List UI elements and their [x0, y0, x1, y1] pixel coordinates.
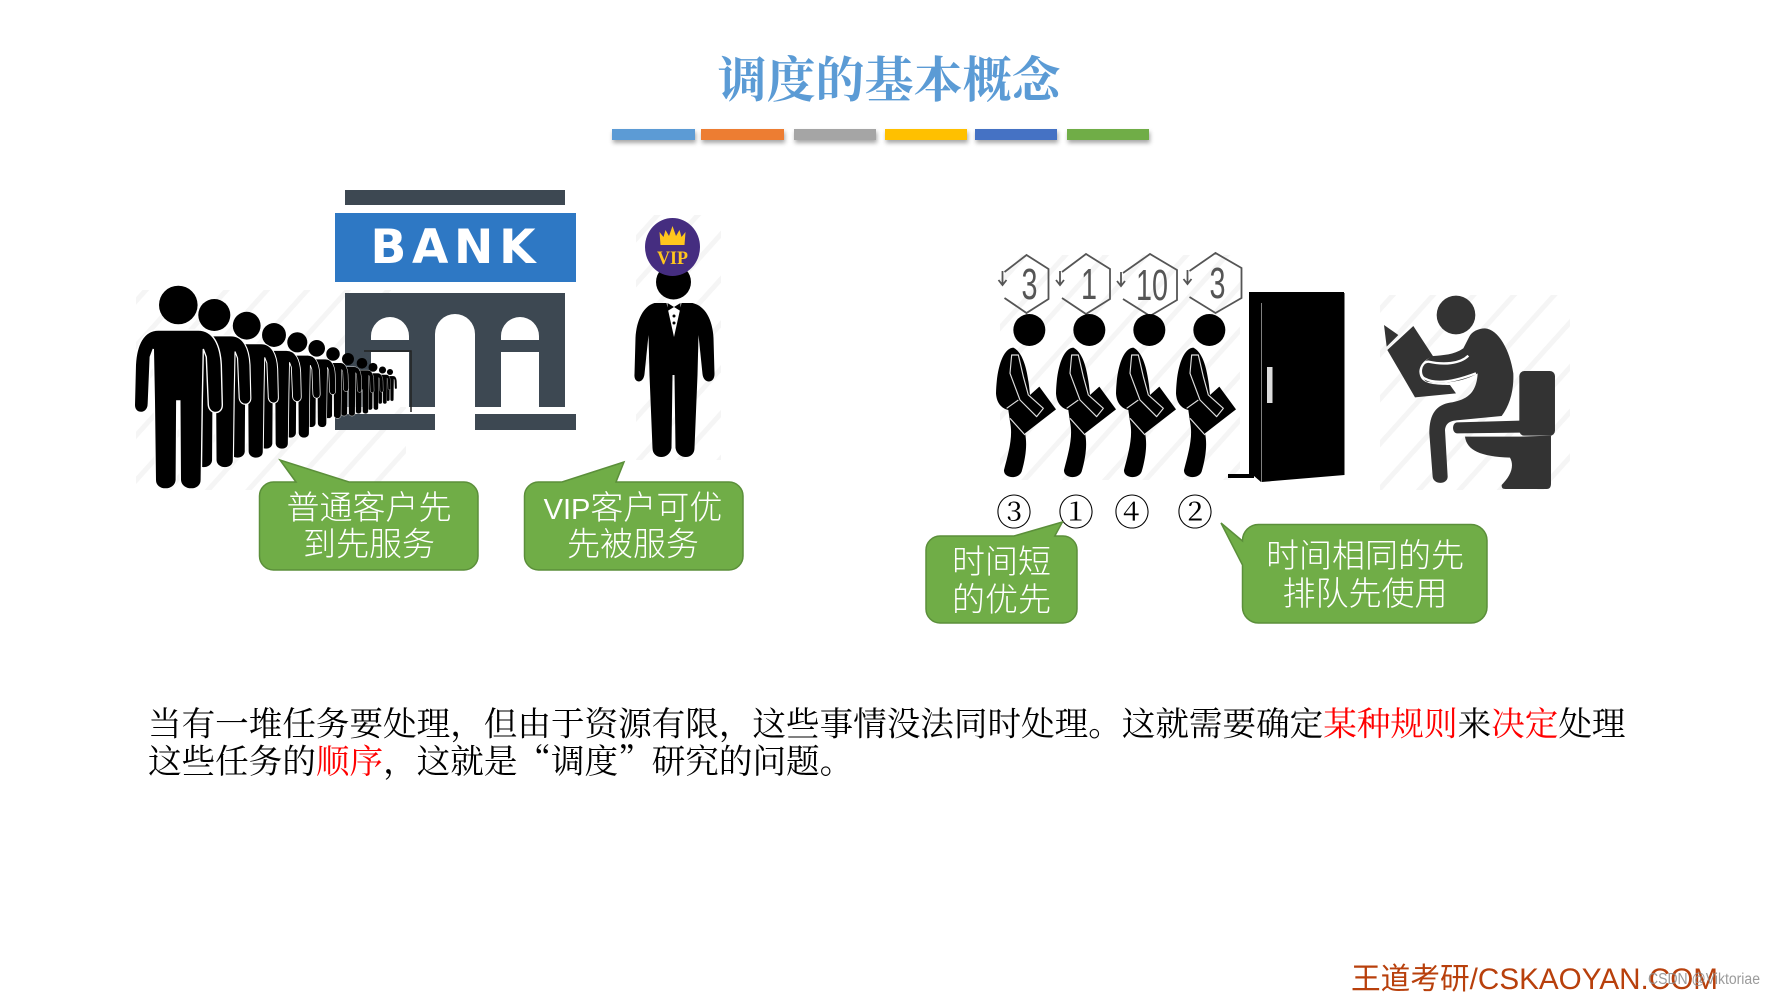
title: 调度的基本概念: [717, 42, 1063, 112]
callout: regular customers: 到先服务: [303, 526, 435, 562]
icon: time hexagon 1: 1: [1081, 260, 1097, 309]
callout: regular customers: [260, 460, 478, 570]
icon: VIP badge: [645, 218, 700, 276]
icon: time hexagon 3 second: 3: [1210, 259, 1226, 308]
watermark: CSDN @Viktoriae: [1648, 971, 1760, 988]
icon: time hexagon 1: [1056, 254, 1110, 314]
order numbers: ②: [1177, 485, 1213, 536]
icon: VIP badge: VIP: [657, 248, 688, 269]
icon: time hexagon 3: 3: [1022, 260, 1038, 309]
icon: waiting people: [996, 314, 1236, 477]
callout: regular customers: 普通客户先: [286, 489, 452, 526]
order numbers: [996, 485, 1213, 536]
explanation text: 当有一堆任务要处理，但由于资源有限，这些事情没法同时处理。这就需要确定某种规则来决定处理: [148, 696, 1626, 746]
callout: shortest first: 的优先: [952, 581, 1051, 618]
icon: time hexagon 10: 10: [1136, 261, 1168, 310]
callout: same time first come: 时间相同的先: [1266, 537, 1464, 574]
order numbers: ③: [996, 485, 1032, 536]
order numbers: ④: [1114, 485, 1150, 536]
callout: VIP customers: [524, 462, 743, 570]
callout: VIP customers: 先被服务: [567, 526, 699, 562]
callout: shortest first: 时间短: [952, 543, 1051, 580]
explanation text: [148, 696, 1626, 783]
colour bar divider: [612, 129, 1149, 140]
callout: shortest first: [926, 522, 1077, 623]
icon: queue of customers: [134, 286, 397, 489]
icon: time hexagon 10: [1117, 254, 1177, 316]
callout: same time first come: 排队先使用: [1282, 575, 1448, 612]
icon: time hexagon 3 second: [1184, 253, 1242, 313]
panel: bank scene: [134, 190, 743, 570]
order numbers: ①: [1058, 485, 1094, 536]
callout: same time first come: [1221, 523, 1487, 623]
explanation text: 这些任务的顺序，这就是“调度”研究的问题。: [148, 734, 853, 783]
icon: time hexagon 3: [998, 255, 1048, 313]
icon: door: [1228, 292, 1344, 482]
icon: person on toilet: [1384, 296, 1555, 489]
panel: restroom queue scene: [926, 253, 1570, 623]
callout: VIP customers: VIP客户可优: [544, 489, 722, 526]
icon: VIP customer: [634, 218, 714, 457]
icon: bank building: [335, 190, 576, 431]
icon: bank building: BANK: [370, 220, 537, 275]
